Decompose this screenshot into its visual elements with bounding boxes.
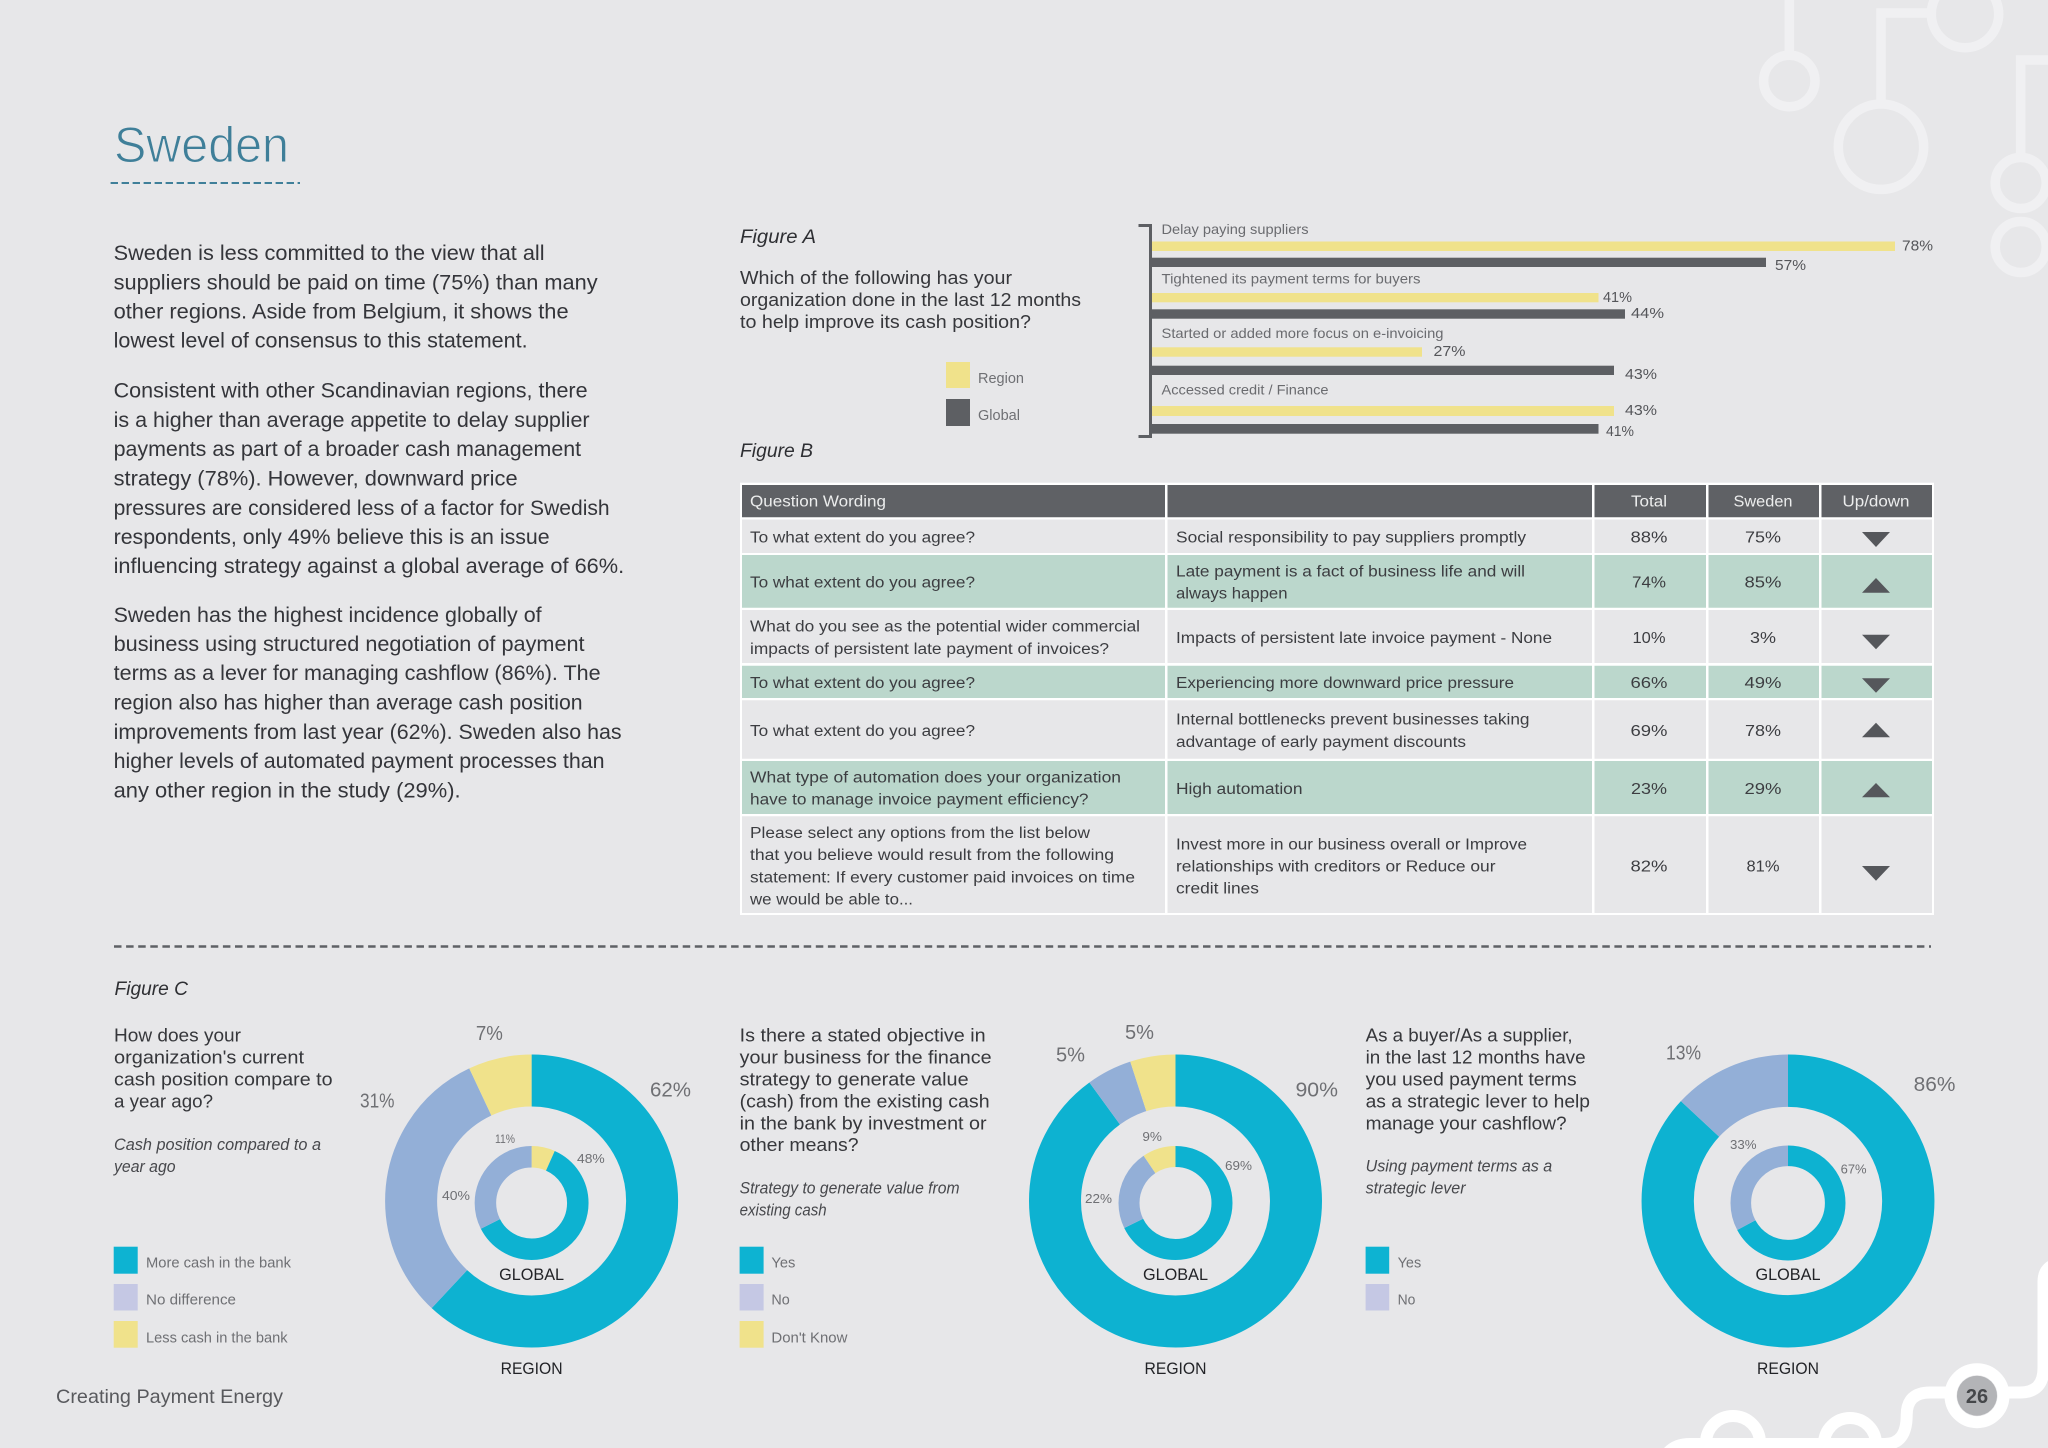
- donut chart 2: REGION: [1144, 1359, 1206, 1378]
- Figure C panel 1 text and legend: No difference: [146, 1293, 236, 1309]
- table row 6: What type of automation does your organization: [750, 770, 1121, 787]
- table row 6: [742, 761, 1932, 814]
- table row 4: Experiencing more downward price pressure: [1176, 675, 1514, 692]
- Figure A legend: Region: [978, 371, 1024, 387]
- table row 6: High automation: [1176, 781, 1302, 798]
- table row 7: [742, 816, 1932, 913]
- body text: suppliers should be paid on time (75%) than many: [114, 271, 598, 294]
- Figure A bar chart: Delay paying suppliers: [1162, 221, 1308, 237]
- donut chart 3: 86%: [1914, 1074, 1956, 1096]
- title: Sweden: [114, 117, 289, 173]
- donut chart 1: 48%: [577, 1151, 605, 1166]
- body text: strategy (78%). However, downward price: [114, 468, 518, 490]
- body text: other regions. Aside from Belgium, it shows the: [114, 301, 569, 324]
- Figure C panel 1 text and legend: Cash position compared to a: [114, 1136, 321, 1154]
- Figure A bar chart: Tightened its payment terms for buyers: [1162, 270, 1420, 286]
- body text: influencing strategy against a global average of 66%.: [114, 555, 624, 578]
- table row 2: [742, 555, 1932, 608]
- donut chart 2: GLOBAL: [1143, 1265, 1208, 1284]
- donut chart 1: REGION: [501, 1359, 563, 1378]
- donut chart 1: 11%: [495, 1132, 515, 1146]
- donut chart 3: 33%: [1730, 1137, 1757, 1152]
- table header row: Total: [1631, 494, 1667, 511]
- table row 3: Impacts of persistent late invoice payment - None: [1176, 630, 1552, 647]
- table row 7: 82%: [1630, 858, 1668, 875]
- body text: improvements from last year (62%). Sweden also has: [114, 721, 622, 744]
- Figure C panel 2 text and legend: (cash) from the existing cash: [740, 1091, 990, 1112]
- Figure C panel 2 text and legend: existing cash: [740, 1202, 827, 1220]
- table row 7: Invest more in our business overall or Improve: [1176, 836, 1527, 853]
- Figure C panel 3 text and legend: As a buyer/As a supplier,: [1366, 1025, 1573, 1046]
- Figure C panel 1 text and legend: a year ago?: [114, 1091, 213, 1112]
- donut chart 2: 90%: [1296, 1080, 1338, 1102]
- table row 3: impacts of persistent late payment of invoices?: [750, 641, 1109, 658]
- Figure C panel 3 text and legend: as a strategic lever to help: [1366, 1091, 1590, 1112]
- table row 4: 49%: [1744, 675, 1782, 692]
- table header row: Question Wording: [750, 494, 886, 511]
- page number badge: 26: [1966, 1386, 1988, 1408]
- donut chart 1: GLOBAL: [499, 1265, 564, 1284]
- Figure C panel 1 text and legend: More cash in the bank: [146, 1255, 292, 1271]
- Figure C panel 3 text and legend: Using payment terms as a: [1366, 1158, 1552, 1176]
- body text: Sweden is less committed to the view that all: [114, 242, 545, 265]
- table row 4: 66%: [1630, 675, 1668, 692]
- Figure A bar chart: 41%: [1603, 290, 1632, 306]
- Figure A heading and question: Which of the following has your: [740, 267, 1012, 288]
- Figure C panel 2 text and legend: Don't Know: [771, 1330, 848, 1346]
- table row 6: 23%: [1631, 781, 1667, 798]
- Figure C panel 2 text and legend: other means?: [740, 1134, 859, 1155]
- decorative circuit graphic top right: [1764, 0, 2048, 273]
- Figure C panel 2 text and legend: Is there a stated objective in: [740, 1025, 986, 1046]
- Figure A bar chart: 41%: [1606, 424, 1634, 440]
- donut chart 3: 67%: [1841, 1162, 1867, 1177]
- table row 7: Please select any options from the list below: [750, 825, 1091, 842]
- Figure A bar chart: 43%: [1625, 367, 1657, 383]
- table row 2: To what extent do you agree?: [750, 574, 975, 591]
- Figure C panel 1 text and legend: year ago: [113, 1158, 176, 1176]
- body text: [114, 242, 624, 802]
- table row 7: statement: If every customer paid invoices on time: [750, 869, 1135, 886]
- Figure C panel 3 text and legend: manage your cashflow?: [1366, 1113, 1567, 1134]
- Figure A legend: [946, 362, 1024, 426]
- donut chart 3: REGION: [1757, 1359, 1819, 1378]
- table row 2: always happen: [1176, 586, 1288, 603]
- table row 3: 10%: [1632, 630, 1666, 647]
- Figure A heading and question: [740, 227, 1081, 332]
- table row 2: 85%: [1744, 574, 1782, 591]
- donut chart 1: 40%: [442, 1188, 470, 1203]
- Figure A bar chart: [1138, 221, 1933, 440]
- body text: pressures are considered less of a factor for Swedish: [114, 497, 610, 520]
- Figure C panel 3 text and legend: strategic lever: [1366, 1180, 1467, 1198]
- Figure C panel 2 text and legend: strategy to generate value: [740, 1069, 969, 1090]
- Figure A bar chart: 43%: [1625, 403, 1657, 419]
- Figure A bar chart: 44%: [1631, 306, 1664, 322]
- donut chart 2: [1055, 1022, 1338, 1378]
- Figure A heading and question: to help improve its cash position?: [740, 311, 1031, 332]
- Figure C panel 2 text and legend: your business for the finance: [740, 1047, 992, 1068]
- Figure C panel 2 text and legend: No: [771, 1293, 790, 1309]
- donut chart 2: 5%: [1056, 1045, 1085, 1067]
- table row 3: [742, 610, 1932, 663]
- donut chart 1: 31%: [360, 1091, 395, 1113]
- donut chart 2: 5%: [1125, 1022, 1154, 1044]
- table row 4: To what extent do you agree?: [750, 675, 975, 692]
- table row 5: [742, 700, 1932, 759]
- table row 2: 74%: [1632, 574, 1666, 591]
- footer text: Creating Payment Energy: [56, 1386, 283, 1408]
- table row 7: 81%: [1746, 858, 1780, 875]
- Figure C panel 2 text and legend: [740, 1025, 992, 1348]
- table row 7: credit lines: [1176, 880, 1259, 897]
- donut chart 1: [360, 1023, 691, 1378]
- Figure B heading: Figure B: [740, 441, 813, 462]
- decorative circuit graphic bottom right: [1664, 1264, 2048, 1448]
- table row 6: 29%: [1744, 781, 1782, 798]
- table row 3: What do you see as the potential wider commercial: [750, 619, 1140, 636]
- table row 3: 3%: [1750, 630, 1776, 647]
- table row 5: To what extent do you agree?: [750, 723, 975, 740]
- donut chart 3: GLOBAL: [1756, 1265, 1820, 1284]
- Figure C panel 2 text and legend: Strategy to generate value from: [740, 1180, 960, 1198]
- Figure C panel 2 text and legend: Yes: [771, 1255, 795, 1271]
- Figure C panel 1 text and legend: How does your: [114, 1025, 241, 1046]
- Figure C panel 3 text and legend: [1366, 1025, 1590, 1310]
- Figure A legend: Global: [978, 408, 1020, 424]
- table row 2: Late payment is a fact of business life and will: [1176, 564, 1525, 581]
- donut chart 1: 7%: [476, 1023, 503, 1045]
- table header row: Up/down: [1842, 494, 1910, 511]
- table row 6: have to manage invoice payment efficiency?: [750, 792, 1089, 809]
- page number badge: [1957, 1376, 1997, 1416]
- table row 4: [742, 666, 1932, 698]
- table row 5: Internal bottlenecks prevent businesses taking: [1176, 712, 1530, 729]
- donut chart 2: 69%: [1225, 1158, 1252, 1173]
- body text: respondents, only 49% believe this is an issue: [114, 526, 550, 549]
- Figure A bar chart: 27%: [1434, 344, 1466, 360]
- body text: is a higher than average appetite to delay supplier: [114, 409, 590, 432]
- Figure C panel 1 text and legend: cash position compare to: [114, 1069, 332, 1090]
- body text: Sweden has the highest incidence globally of: [114, 604, 542, 627]
- table row 1: Social responsibility to pay suppliers promptly: [1176, 530, 1526, 547]
- Figure C panel 1 text and legend: [113, 1025, 333, 1348]
- table row 5: 69%: [1630, 723, 1668, 740]
- body text: region also has higher than average cash position: [114, 692, 583, 714]
- Figure C panel 3 text and legend: Yes: [1398, 1255, 1421, 1271]
- table row 1: 75%: [1745, 530, 1781, 547]
- table row 5: 78%: [1745, 723, 1781, 740]
- Figure C panel 3 text and legend: in the last 12 months have: [1366, 1047, 1586, 1068]
- body text: payments as part of a broader cash management: [114, 438, 581, 461]
- table row 1: [742, 520, 1932, 553]
- table header row: [742, 485, 1932, 517]
- Figure C panel 2 text and legend: in the bank by investment or: [740, 1113, 987, 1134]
- Figure C panel 1 text and legend: organization's current: [114, 1047, 304, 1068]
- Figure B table: [740, 483, 1934, 915]
- donut chart 2: 9%: [1142, 1129, 1162, 1144]
- table row 1: To what extent do you agree?: [750, 530, 975, 547]
- Figure C heading: Figure C: [114, 979, 188, 1000]
- body text: terms as a lever for managing cashflow (86%). The: [114, 662, 601, 685]
- Figure A bar chart: Started or added more focus on e-invoicing: [1162, 325, 1444, 341]
- donut chart 3: [1666, 1042, 1956, 1378]
- donut chart 2: 22%: [1085, 1191, 1112, 1206]
- table row 5: advantage of early payment discounts: [1176, 734, 1466, 751]
- Figure C panel 1 text and legend: Less cash in the bank: [146, 1330, 288, 1346]
- donut chart 3: 13%: [1666, 1042, 1701, 1064]
- body text: higher levels of automated payment processes than: [114, 750, 605, 773]
- table row 1: 88%: [1630, 530, 1668, 547]
- Figure A bar chart: Accessed credit / Finance: [1162, 382, 1329, 398]
- body text: lowest level of consensus to this statement.: [114, 330, 528, 353]
- Figure C panel 3 text and legend: No: [1398, 1293, 1415, 1309]
- table row 7: relationships with creditors or Reduce our: [1176, 858, 1496, 875]
- Figure A heading and question: Figure A: [740, 227, 816, 248]
- body text: business using structured negotiation of payment: [114, 633, 585, 656]
- body text: any other region in the study (29%).: [114, 780, 461, 802]
- Figure C panel 3 text and legend: you used payment terms: [1366, 1069, 1577, 1090]
- table header row: Sweden: [1734, 494, 1792, 511]
- body text: Consistent with other Scandinavian regions, there: [114, 380, 588, 403]
- Figure A bar chart: 57%: [1775, 258, 1806, 274]
- donut chart 1: 62%: [650, 1080, 691, 1102]
- table row 7: that you believe would result from the following: [750, 847, 1114, 864]
- Figure A bar chart: 78%: [1902, 239, 1933, 255]
- Figure A heading and question: organization done in the last 12 months: [740, 289, 1081, 310]
- table row 7: we would be able to...: [749, 891, 913, 908]
